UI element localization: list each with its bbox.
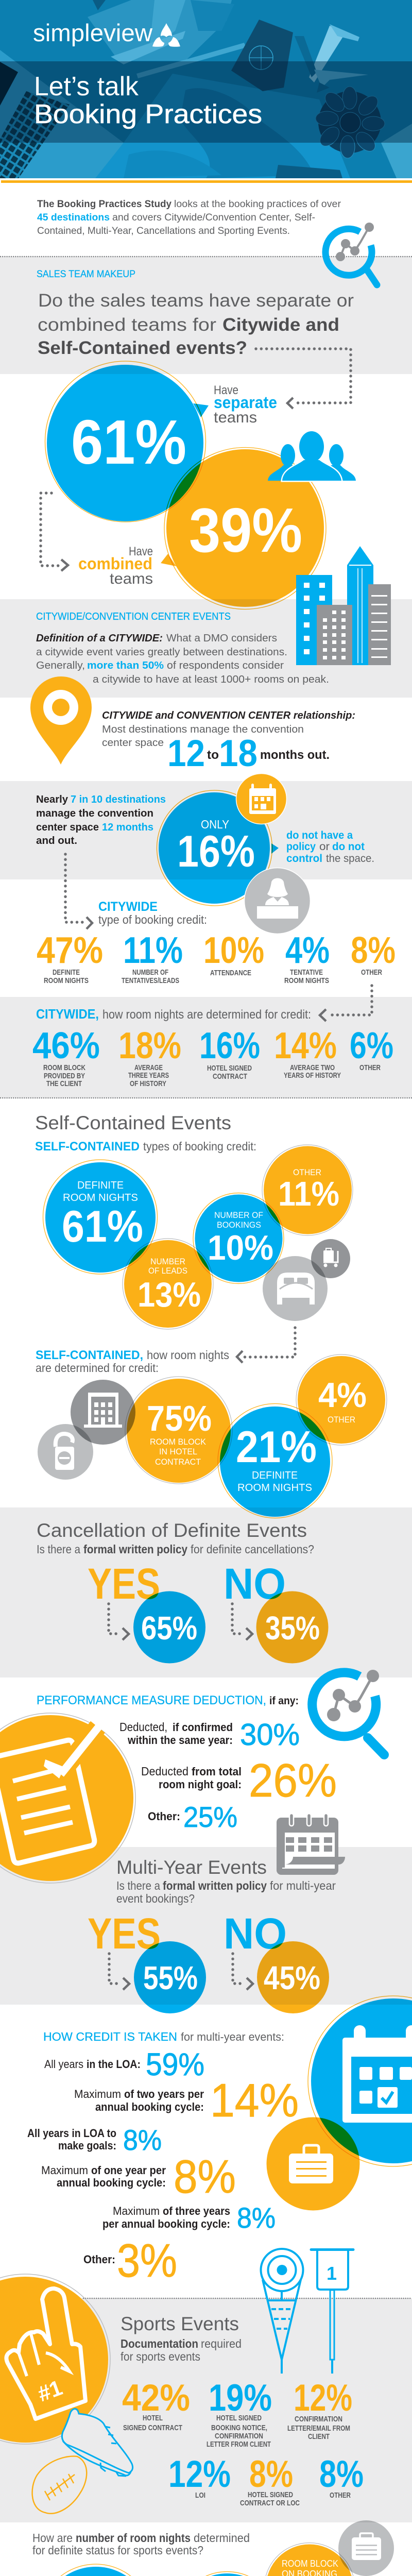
text: nearly 7 in 10: and out. — [36, 835, 77, 846]
stat: 6 percent other: 6% — [350, 1025, 393, 1066]
stat: 11 percent tentatives: NUMBER OF — [132, 968, 168, 977]
stat: 8 percent all years to make goals: make goals: — [58, 2139, 116, 2152]
bubble text: 21 percent — [236, 1422, 317, 1494]
answer: yes word: YES — [88, 1909, 161, 1958]
bubble text: 21 percent: DEFINITE — [252, 1470, 298, 1481]
bubble text: number of bookings — [208, 1210, 273, 1267]
intro text: The Booking Practices Study — [37, 199, 171, 210]
text: do not have a policy — [286, 829, 374, 865]
stat: 30 percent: within the same year: — [127, 1734, 233, 1747]
definition text: a citywide to have at least 1000+ rooms on peak. — [93, 674, 329, 685]
stat: 12 percent LOI: 12% — [168, 2453, 231, 2495]
definition text: Definition of a CITYWIDE: — [36, 633, 163, 644]
definition text: a citywide event varies greatly between destinations. — [36, 647, 287, 658]
bubble: 19 percent cvb formula — [175, 2572, 280, 2576]
heading: citywide type of booking credit: type of booking credit: — [98, 913, 207, 926]
text: nearly 7 in 10: 12 months — [102, 822, 153, 833]
circle: 55 percent — [134, 1941, 206, 2013]
bubble: 61 percent separate — [45, 361, 209, 522]
arrow: to citywide booking credit — [65, 854, 92, 929]
label: have separate teams — [214, 383, 277, 426]
heading: citywide how room nights determined: CITYWIDE, — [36, 1006, 99, 1022]
stat: 19 percent: HOTEL SIGNED — [216, 2414, 262, 2422]
icon: gray calendar — [277, 1814, 345, 1875]
stat: 42 percent: 42% — [122, 2377, 190, 2419]
stat: 8 percent other: 8% — [351, 930, 396, 971]
stat: 8 percent maximum one year: 8% — [174, 2151, 236, 2203]
stat: 8 percent maximum one year: annual booking cycle: — [57, 2176, 166, 2189]
label: have separate teams: teams — [214, 409, 257, 426]
bubble text: 75 percent — [147, 1398, 212, 1467]
heading: multi-year events: Multi-Year Events — [116, 1857, 267, 1878]
definition text: more than 50% — [87, 660, 164, 671]
text: do not have a policy: do not — [332, 841, 365, 853]
bubble text: 75 percent: IN HOTEL — [159, 1447, 197, 1456]
icon: magnifier with network — [325, 223, 377, 285]
definition text: What a DMO considers — [166, 633, 277, 644]
heading: how credit is taken — [43, 2030, 284, 2043]
subheading: self-contained booking credit: types of booking credit: — [143, 1140, 256, 1153]
stat: 11 percent tentatives: 11% — [123, 930, 183, 971]
bubble text: 75 percent: ROOM BLOCK — [150, 1437, 207, 1447]
stat: 59 percent all years in LOA: in the LOA: — [87, 2058, 141, 2071]
bubble: 39 percent combined — [161, 447, 326, 609]
text: relationship 12 to 18 months: center space — [102, 737, 164, 749]
stat: 19 percent: CONFIRMATION — [215, 2432, 263, 2441]
stat: 26 percent: 26% — [249, 1755, 337, 1807]
text: do not have a policy: or — [319, 841, 330, 853]
stat: 8 percent hotel signed contract or LOC: HOTEL SIGNED — [248, 2490, 293, 2499]
icon: luggage cart circle — [311, 1239, 350, 1278]
stat: 26 percent — [141, 1755, 337, 1807]
bubble text: 9 percent: ROOM BLOCK — [282, 2558, 338, 2569]
icon: orange briefcase circle — [267, 2117, 359, 2210]
stat: 25 percent: 25% — [183, 1801, 237, 1833]
yes no: cancellation — [88, 1560, 329, 1663]
circle: 35 percent — [256, 1591, 329, 1663]
stat: 8 percent maximum one year — [41, 2151, 236, 2203]
bubble text: number of leads: 13% — [138, 1275, 201, 1314]
question: multi-year policy: for multi-year — [270, 1879, 336, 1892]
bubble text: number of leads: OF LEADS — [148, 1266, 187, 1276]
stat: 12 percent confirmation: CLIENT — [308, 2432, 330, 2441]
stat: 18 percent three years: OF HISTORY — [130, 1079, 166, 1088]
icon: target pennant — [261, 2249, 303, 2374]
stat: 46 percent room block: ROOM BLOCK — [43, 1063, 85, 1072]
bubble: 61 percent definite room nights — [43, 1160, 158, 1274]
icon: bed circle — [263, 1256, 328, 1321]
stat: 59 percent all years in LOA: 59% — [146, 2047, 204, 2082]
icon: magnifier with network large — [312, 1670, 384, 1755]
question: room nights for sports events: determined — [194, 2531, 250, 2545]
stat: 46 percent room block: THE CLIENT — [46, 1079, 82, 1088]
bubble: 13 percent leads — [123, 1239, 213, 1329]
definition text: Generally, — [36, 660, 85, 671]
stat: 30 percent: 30% — [240, 1718, 300, 1752]
answer: no word: NO — [224, 1909, 287, 1958]
bubble: 4 percent other — [296, 1354, 387, 1445]
bubble: only 16 percent — [157, 790, 279, 906]
bubble: 75 percent room block — [125, 1377, 232, 1484]
bubble text: 75 percent: CONTRACT — [155, 1457, 201, 1467]
heading: citywide how room nights determined — [36, 1006, 311, 1022]
heading: cancellation of definite events: Cancellation of Definite Events — [37, 1520, 307, 1541]
stat: 8 percent maximum one year: of one year per — [91, 2164, 166, 2177]
label: have combined teams: teams — [110, 570, 153, 587]
bubble text: 75 percent: 75% — [147, 1398, 212, 1438]
text: relationship 12 to 18 months — [102, 710, 355, 774]
question: room nights for sports events — [32, 2531, 250, 2557]
arrow: yes — [109, 1604, 129, 1640]
circle: 65 percent — [133, 1591, 205, 1663]
bubble text: number of bookings: BOOKINGS — [217, 1220, 261, 1230]
bubble: 21 percent definite — [218, 1403, 332, 1518]
heading: how credit is taken: HOW CREDIT IS TAKEN — [43, 2030, 177, 2043]
label: have combined teams: combined — [78, 554, 152, 573]
stat: 8 percent other: OTHER — [330, 2491, 351, 2500]
heading: citywide type of booking credit — [98, 900, 207, 926]
stat: 42 percent: HOTEL — [143, 2414, 163, 2422]
bubble: 9 percent booking notices — [264, 2543, 355, 2576]
icon: people — [268, 431, 356, 481]
stat: 10 percent attendance: 10% — [203, 930, 264, 971]
icon: receptionist circle — [244, 868, 310, 934]
heading: citywide convention center events: CITYWIDE/CONVENTION CENTER EVENTS — [36, 611, 231, 622]
subheading: self-contained booking credit — [35, 1140, 256, 1154]
arrow: yes — [109, 1954, 129, 1990]
question text: Citywide and — [222, 315, 339, 335]
stat: 8 percent other: OTHER — [361, 968, 382, 977]
stat: 8 percent all years to make goals — [27, 2124, 162, 2156]
stat: 19 percent — [207, 2377, 272, 2449]
stat: 59 percent all years in LOA — [44, 2047, 204, 2082]
stat: 8 percent hotel signed contract or LOC: CONTRACT OR LOC — [240, 2499, 300, 2507]
text: relationship 12 to 18 months: to — [207, 748, 219, 762]
icon: foam finger circle: #1 — [35, 2375, 65, 2406]
stat: 46 percent room block — [32, 1025, 100, 1088]
text: do not have a policy: the space. — [326, 853, 374, 865]
label: have separate teams: Have — [214, 383, 238, 397]
arrow: to citywide room nights — [320, 986, 372, 1021]
arrow: to combined — [41, 493, 68, 571]
stat: 14 percent maximum two years: Maximum — [74, 2088, 121, 2100]
stat: 26 percent: Deducted — [141, 1765, 188, 1778]
question text: combined teams for — [38, 315, 216, 335]
stat: 55 percent: 55% — [143, 1959, 198, 1996]
bubble text: number of bookings: 10% — [208, 1228, 273, 1267]
text: nearly 7 in 10: center space — [36, 822, 99, 833]
question text — [38, 291, 354, 358]
stat: 8 percent maximum one year: Maximum — [41, 2164, 88, 2177]
icon: number one flag — [311, 2249, 353, 2374]
heading: performance measure deduction: PERFORMANCE MEASURE DEDUCTION, — [37, 1693, 266, 1707]
text: relationship 12 to 18 months: Most destinations manage the convention — [102, 724, 304, 735]
answer: yes word: YES — [88, 1560, 160, 1608]
stats row: citywide room nights — [32, 1025, 393, 1088]
subheading: documentation: for sports events — [121, 2350, 200, 2363]
stat: 6 percent other: OTHER — [359, 1063, 381, 1072]
stat: 4 percent tentative room nights — [284, 930, 330, 985]
circle: 45 percent — [257, 1941, 329, 2013]
stat: 25 percent — [148, 1801, 237, 1833]
stat: 47 percent definite room nights: ROOM NIGHTS — [44, 976, 89, 985]
subheading: self-contained room nights: how room nights — [147, 1348, 229, 1362]
text: nearly 7 in 10: Nearly — [36, 794, 68, 805]
title: Booking Practices — [34, 99, 262, 129]
bubble text: 4 percent: 4% — [318, 1376, 367, 1415]
question: cancellation policy — [37, 1543, 314, 1556]
stat: 8 percent hotel signed contract or LOC — [240, 2453, 300, 2507]
question: multi-year policy: event bookings? — [116, 1892, 195, 1905]
icon: door hanger circle — [38, 1424, 93, 1480]
intro text: Contained, Multi-Year, Cancellations and Sporting Events. — [37, 226, 290, 236]
icon: calendar circle — [236, 774, 286, 824]
bubble text: 9 percent — [282, 2558, 338, 2576]
question: room nights for sports events: for definite status for sports events? — [32, 2544, 203, 2557]
heading: sales team makeup: SALES TEAM MAKEUP — [37, 269, 135, 280]
stat: 4 percent tentative room nights: TENTATIVE — [290, 968, 323, 977]
stat: 14 percent maximum two years: 14% — [210, 2075, 299, 2127]
icon: city buildings — [296, 546, 391, 665]
stat: 16 percent hotel signed: HOTEL SIGNED — [207, 1064, 252, 1073]
question: multi-year policy: Is there a — [116, 1879, 160, 1892]
stat: 4 percent tentative room nights: 4% — [285, 930, 330, 971]
text: do not have a policy: do not have a — [286, 829, 353, 841]
icon: football cleat — [62, 2409, 133, 2476]
icon: football — [32, 2456, 87, 2514]
bubble: only 16 percent: 16% — [177, 827, 255, 876]
stat: 65 percent: 65% — [141, 1609, 197, 1647]
stat: 46 percent room block: PROVIDED BY — [44, 1072, 85, 1080]
text: relationship 12 to 18 months: 12 — [167, 733, 205, 774]
intro text: and covers Citywide/Convention Center, Self- — [112, 212, 315, 223]
title — [34, 72, 262, 129]
stat: 19 percent: BOOKING NOTICE, — [211, 2424, 267, 2432]
accent bar — [1, 180, 412, 183]
heading: self-contained events: Self-Contained Events — [35, 1112, 231, 1133]
stat: 8 percent maximum three years: 8% — [237, 2201, 276, 2234]
text: relationship 12 to 18 months: CITYWIDE and CONVENTION CENTER relationship: — [102, 710, 355, 721]
bubble text: other 11 percent: 11% — [278, 1175, 339, 1213]
stat: 14 percent two years: AVERAGE TWO — [290, 1063, 335, 1072]
stat: 8 percent maximum three years: of three years — [163, 2205, 230, 2217]
stat: 11 percent tentatives — [122, 930, 183, 985]
stat: 10 percent attendance: ATTENDANCE — [210, 969, 251, 977]
arrow: no — [233, 1954, 253, 1990]
question: cancellation policy: formal written policy — [83, 1543, 187, 1556]
stat: 8 percent other: 8% — [319, 2453, 364, 2495]
question: cancellation policy: for definite cancellations? — [191, 1543, 314, 1556]
heading: performance measure deduction: if any: — [269, 1695, 299, 1707]
subheading: documentation: Documentation — [121, 2337, 198, 2350]
stat: 4 percent tentative room nights: ROOM NIGHTS — [284, 976, 329, 985]
stat: 25 percent: Other: — [148, 1810, 180, 1823]
bubble text: 4 percent: OTHER — [328, 1415, 355, 1425]
stats: sports documentation — [122, 2377, 364, 2507]
stat: 30 percent — [119, 1718, 300, 1752]
stat: 12 percent confirmation: CONFIRMATION — [295, 2415, 342, 2424]
stat: 26 percent: room night goal: — [159, 1778, 242, 1791]
logo: simpleview: simpleview — [33, 19, 153, 46]
subheading: self-contained room nights: are determined for credit: — [36, 1361, 159, 1375]
question: room nights for sports events: number of room nights — [76, 2531, 191, 2545]
bubble text: 21 percent: ROOM NIGHTS — [237, 1482, 312, 1494]
stat: 47 percent definite room nights: 47% — [37, 930, 103, 971]
stat: 39 percent: 39% — [189, 495, 302, 565]
subheading: documentation — [121, 2337, 242, 2363]
bubble text: other 11 percent: OTHER — [293, 1167, 321, 1177]
text: nearly 7 in 10 — [36, 794, 166, 846]
stat: 16 percent hotel signed: 16% — [199, 1025, 260, 1066]
stat: 14 percent maximum two years: annual booking cycle: — [95, 2100, 204, 2113]
subheading: documentation: required — [201, 2337, 242, 2350]
title: Let’s talk — [34, 72, 139, 101]
text: relationship 12 to 18 months: 18 — [219, 733, 258, 774]
stat: 8 percent hotel signed contract or LOC: 8% — [249, 2453, 293, 2495]
heading: how credit is taken: for multi-year events: — [181, 2030, 284, 2043]
subheading: self-contained room nights — [36, 1348, 229, 1375]
stat: 47 percent definite room nights — [37, 930, 103, 985]
icon: document checklist circle — [0, 1713, 135, 1883]
stat: 19 percent: 19% — [209, 2377, 272, 2419]
stat: 12 percent confirmation: LETTER/EMAIL FROM — [287, 2424, 350, 2433]
stat: 12 percent LOI: LOI — [195, 2491, 205, 2500]
stat: 8 percent maximum three years: Maximum — [113, 2205, 160, 2217]
stat: 14 percent two years: 14% — [274, 1025, 337, 1066]
stat: 12 percent confirmation — [287, 2377, 352, 2441]
stat: 45 percent: 45% — [264, 1959, 320, 1996]
bubble text: definite room nights: DEFINITE — [77, 1180, 124, 1191]
bubble: 10 percent bookings — [193, 1193, 284, 1284]
icon: number one flag: 1 — [327, 2263, 337, 2284]
subheading: self-contained booking credit: SELF-CONTAINED — [35, 1140, 140, 1154]
definition text: of respondents consider — [167, 660, 284, 671]
stat: 3 percent other: 3% — [117, 2235, 177, 2287]
label: have combined teams: Have — [129, 545, 153, 558]
bubble text: definite room nights: ROOM NIGHTS — [63, 1192, 138, 1204]
stats row: citywide booking credit — [37, 930, 396, 985]
label: have separate teams: separate — [214, 393, 277, 412]
header photo banner — [0, 0, 412, 180]
stat: 26 percent: from total — [192, 1765, 242, 1778]
question: cancellation policy: Is there a — [37, 1543, 80, 1556]
stat: 16 percent hotel signed: CONTRACT — [213, 1072, 247, 1081]
heading: citywide type of booking credit: CITYWIDE — [98, 900, 158, 914]
question: multi-year policy: formal written policy — [163, 1879, 267, 1892]
stat: 3 percent other — [83, 2235, 177, 2287]
intro text — [37, 199, 341, 236]
text: relationship 12 to 18 months: months out. — [260, 748, 330, 762]
stat: 8 percent all years to make goals: 8% — [123, 2124, 162, 2156]
stat: 14 percent maximum two years — [74, 2075, 299, 2127]
bubble: 36 percent room block — [39, 2564, 153, 2576]
bubble text: number of leads — [138, 1257, 201, 1314]
icon: location pin — [30, 676, 92, 765]
stat: 18 percent three years — [118, 1025, 181, 1088]
stat: 12 percent confirmation: 12% — [294, 2377, 352, 2419]
text: do not have a policy: policy — [286, 841, 316, 853]
label: have combined teams — [78, 545, 153, 587]
bubble text: number of leads: NUMBER — [150, 1257, 185, 1266]
stat: 16 percent hotel signed — [199, 1025, 260, 1081]
heading: citywide how room nights determined: how room nights are determined for credit: — [102, 1008, 311, 1022]
bubble text: definite room nights: 61% — [62, 1202, 143, 1251]
icon: hotel building circle — [71, 1380, 135, 1445]
intro text: 45 destinations — [37, 212, 110, 223]
arrow: no — [232, 1604, 252, 1640]
bubble: 11 percent other — [262, 1145, 353, 1235]
stat: 30 percent: Deducted, — [119, 1720, 167, 1734]
text: nearly 7 in 10: 7 in 10 destinations — [71, 794, 166, 805]
stat: 47 percent definite room nights: DEFINITE — [53, 968, 80, 977]
stat: 30 percent: if confirmed — [173, 1721, 233, 1734]
stat: 19 percent: LETTER FROM CLIENT — [207, 2440, 271, 2449]
icon: gray suitcase circle — [338, 2520, 394, 2576]
bubble text: definite room nights — [62, 1180, 143, 1251]
bubble text: number of bookings: NUMBER OF — [214, 1210, 263, 1220]
icon: big calendar circle — [308, 1996, 412, 2166]
question: multi-year policy — [116, 1879, 336, 1905]
definition text — [36, 633, 329, 685]
stat: 18 percent three years: 18% — [118, 1025, 181, 1066]
answer: no word: NO — [224, 1560, 286, 1608]
question: room nights for sports events: How are — [32, 2531, 73, 2545]
stat: 42 percent: SIGNED CONTRACT — [123, 2424, 182, 2432]
stat: 35 percent: 35% — [265, 1609, 320, 1647]
stat: 8 percent maximum three years: per annual booking cycle: — [102, 2217, 230, 2230]
stat: 8 percent all years to make goals: All years in LOA to — [27, 2127, 116, 2140]
stat: 46 percent room block: 46% — [32, 1025, 100, 1066]
yes no: multi-year — [88, 1909, 329, 2013]
bubble text: 21 percent: 21% — [236, 1422, 317, 1472]
arrow: question to separate — [256, 349, 351, 409]
intro text: looks at the booking practices of over — [174, 199, 341, 210]
stat: 14 percent two years: YEARS OF HISTORY — [284, 1071, 341, 1080]
stat: 14 percent two years — [274, 1025, 341, 1080]
question text: Self-Contained events? — [38, 338, 247, 358]
stat: 8 percent maximum three years — [102, 2201, 276, 2234]
stat: 14 percent maximum two years: of two years per — [124, 2088, 204, 2100]
text: nearly 7 in 10: manage the convention — [36, 808, 153, 819]
stat: 61 percent: 61% — [71, 407, 186, 477]
question text: Do the sales teams have separate or — [38, 291, 354, 311]
text: do not have a policy: control — [286, 853, 322, 865]
icon: foam finger circle — [0, 2274, 110, 2444]
heading: sports events: Sports Events — [121, 2313, 239, 2334]
stat: 18 percent three years: AVERAGE — [134, 1063, 163, 1072]
subheading: self-contained room nights: SELF-CONTAINED, — [36, 1348, 143, 1362]
stat: 18 percent three years: THREE YEARS — [128, 1071, 169, 1080]
stat: 3 percent other: Other: — [83, 2253, 115, 2266]
arrow: to self-contained room nights — [237, 1328, 295, 1363]
bubble: only 16 percent: ONLY — [201, 818, 229, 831]
stat: 11 percent tentatives: TENTATIVES/LEADS — [122, 976, 179, 985]
stat: 59 percent all years in LOA: All years — [44, 2058, 83, 2071]
